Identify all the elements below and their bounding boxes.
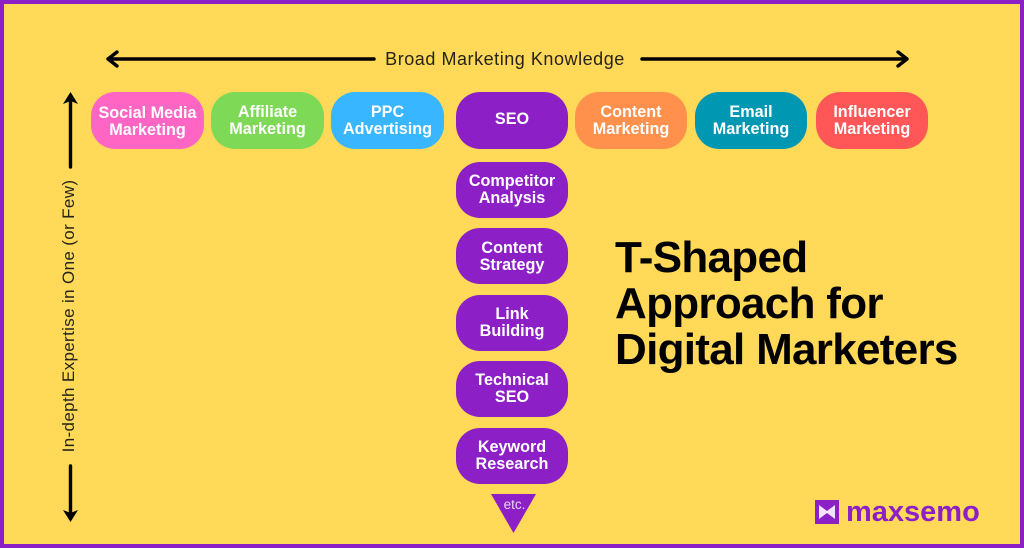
pill: ppc advertising: PPC: [371, 102, 404, 120]
title: T-Shaped: [615, 233, 807, 282]
triangle: etc.: [491, 494, 536, 533]
pill: seo: SEO: [495, 110, 529, 128]
pill: technical seo: [456, 361, 568, 417]
pill: link building: Building: [480, 322, 544, 340]
pill: competitor analysis: Competitor: [469, 172, 555, 190]
pill: email marketing: Marketing: [713, 120, 789, 138]
pill: content strategy: Content: [481, 239, 543, 257]
title: Approach for: [615, 279, 883, 328]
pill: social media marketing: Social Media: [98, 104, 197, 122]
pill: affiliate marketing: Marketing: [229, 120, 306, 138]
pill: content marketing: Content: [600, 102, 662, 120]
triangle: etc.: etc.: [504, 497, 525, 512]
heading: in-depth expertise: In-depth Expertise in One (or Few): [59, 180, 78, 452]
title: [615, 233, 958, 374]
heading: broad marketing knowledge: Broad Marketing Knowledge: [385, 49, 625, 69]
pill: technical seo: SEO: [495, 388, 529, 406]
pill: influencer marketing: Marketing: [834, 120, 910, 138]
pill: content strategy: [456, 228, 568, 284]
pill: technical seo: Technical: [475, 371, 549, 389]
pill: affiliate marketing: [211, 92, 324, 149]
pill: content strategy: Strategy: [480, 256, 544, 274]
pill: seo: [456, 92, 568, 149]
pill: keyword research: [456, 428, 568, 484]
pill: link building: [456, 295, 568, 351]
logo: maxsemo: [815, 496, 980, 528]
pill: email marketing: Email: [729, 102, 773, 120]
pill: social media marketing: Marketing: [109, 121, 186, 139]
pill: link building: Link: [495, 304, 529, 322]
icon: logo mark: [815, 500, 839, 524]
pill: keyword research: Research: [476, 455, 548, 473]
pill: influencer marketing: [816, 92, 928, 149]
pill: email marketing: [695, 92, 807, 149]
pill: social media marketing: [91, 92, 204, 149]
pill: influencer marketing: Influencer: [833, 102, 911, 120]
pill: competitor analysis: Analysis: [479, 189, 545, 207]
title: Digital Marketers: [615, 325, 958, 374]
pill: ppc advertising: [331, 92, 444, 149]
logo wordmark: maxsemo: [846, 496, 980, 528]
pill: content marketing: Marketing: [593, 120, 669, 138]
pill: keyword research: Keyword: [478, 438, 546, 456]
pill: competitor analysis: [456, 162, 568, 218]
pill: content marketing: [575, 92, 687, 149]
pill: affiliate marketing: Affiliate: [238, 102, 297, 120]
pill: ppc advertising: Advertising: [343, 120, 432, 138]
